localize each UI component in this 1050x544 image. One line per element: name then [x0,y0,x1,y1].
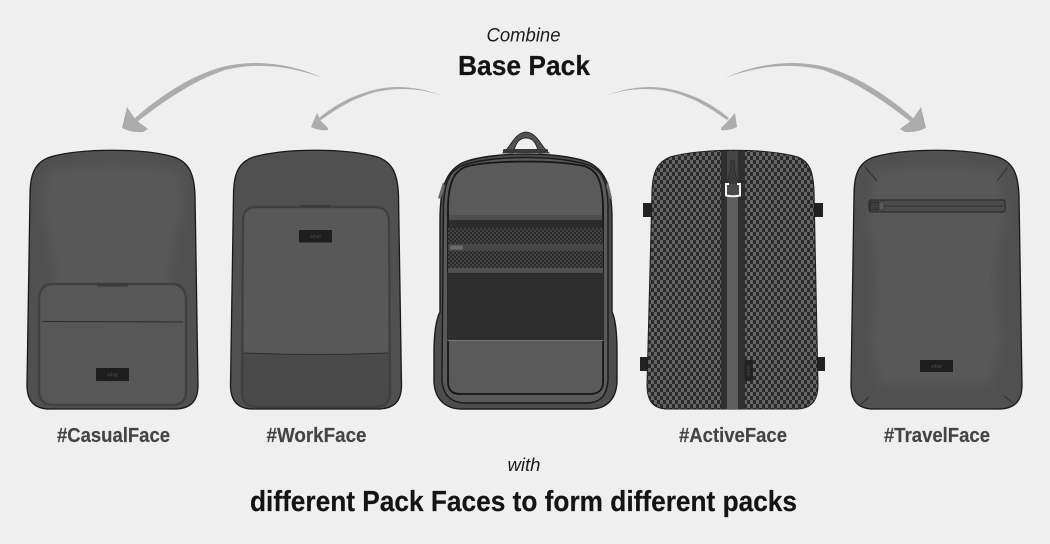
front pocket [39,284,186,405]
band under top panel [449,215,602,220]
label: CasualFace: #CasualFace [57,425,170,447]
pocket lower section [243,353,389,407]
pack shell [851,150,1022,409]
label: WorkFace: #WorkFace [266,425,366,447]
brand label: what [107,372,118,378]
handle base [503,149,548,153]
pocket upper section [242,206,390,354]
label: ActiveFace: #ActiveFace [679,425,787,447]
arrow: base pack to TravelFace [725,63,926,132]
label: TravelFace: #TravelFace [884,425,990,447]
side label [744,360,753,381]
side tabs [640,203,825,371]
seam band [448,268,603,273]
heading: Combine: Combine [486,24,561,46]
arrow: base pack to WorkFace [311,87,443,130]
white loop [726,184,740,196]
pocket seam [42,320,183,323]
panel: TravelFace pack [851,150,1022,409]
outer body [434,154,617,409]
brand label [96,368,129,381]
arrow: base pack to ActiveFace [605,87,737,130]
pack shell [27,150,198,409]
panel: ActiveFace pack [640,150,825,409]
soft highlight [866,166,1006,385]
zipper pull [726,160,739,186]
side clips [438,182,612,199]
side label: what [746,365,752,376]
inner panel [448,162,603,394]
zipper band [448,244,603,251]
corner stitching [860,167,1013,405]
zipper pull [450,246,463,250]
heading: Base Pack: Base Pack [458,50,590,81]
brand label [299,230,332,242]
pocket seam [244,353,388,354]
pocket outline [242,207,390,407]
mesh shell [647,150,818,409]
text: with: with [508,454,540,475]
middle trim [442,158,608,403]
brand label: what [931,364,942,370]
brand label [920,360,953,372]
panel: CasualFace pack [27,150,198,409]
lower panel seam [448,340,604,341]
large dark pocket [448,273,604,340]
soft highlight [42,164,184,300]
horizontal zipper [869,200,1005,212]
lower mesh pocket [448,251,603,268]
center webbing [721,151,745,409]
panel: WorkFace pack [230,150,402,409]
upper mesh pocket [448,228,603,244]
dark strip [449,220,602,228]
pocket zipper pull [97,284,128,286]
panel: Base Pack [434,132,617,409]
pack shell [230,150,402,409]
center stripe [727,151,738,409]
stripe top shade [727,151,738,184]
arrow: base pack to CasualFace [122,63,323,132]
brand label: what [310,234,321,240]
carry handle [503,132,549,153]
pocket zipper pull [300,205,331,208]
footer heading: different Pack Faces to form different packs [250,486,797,518]
